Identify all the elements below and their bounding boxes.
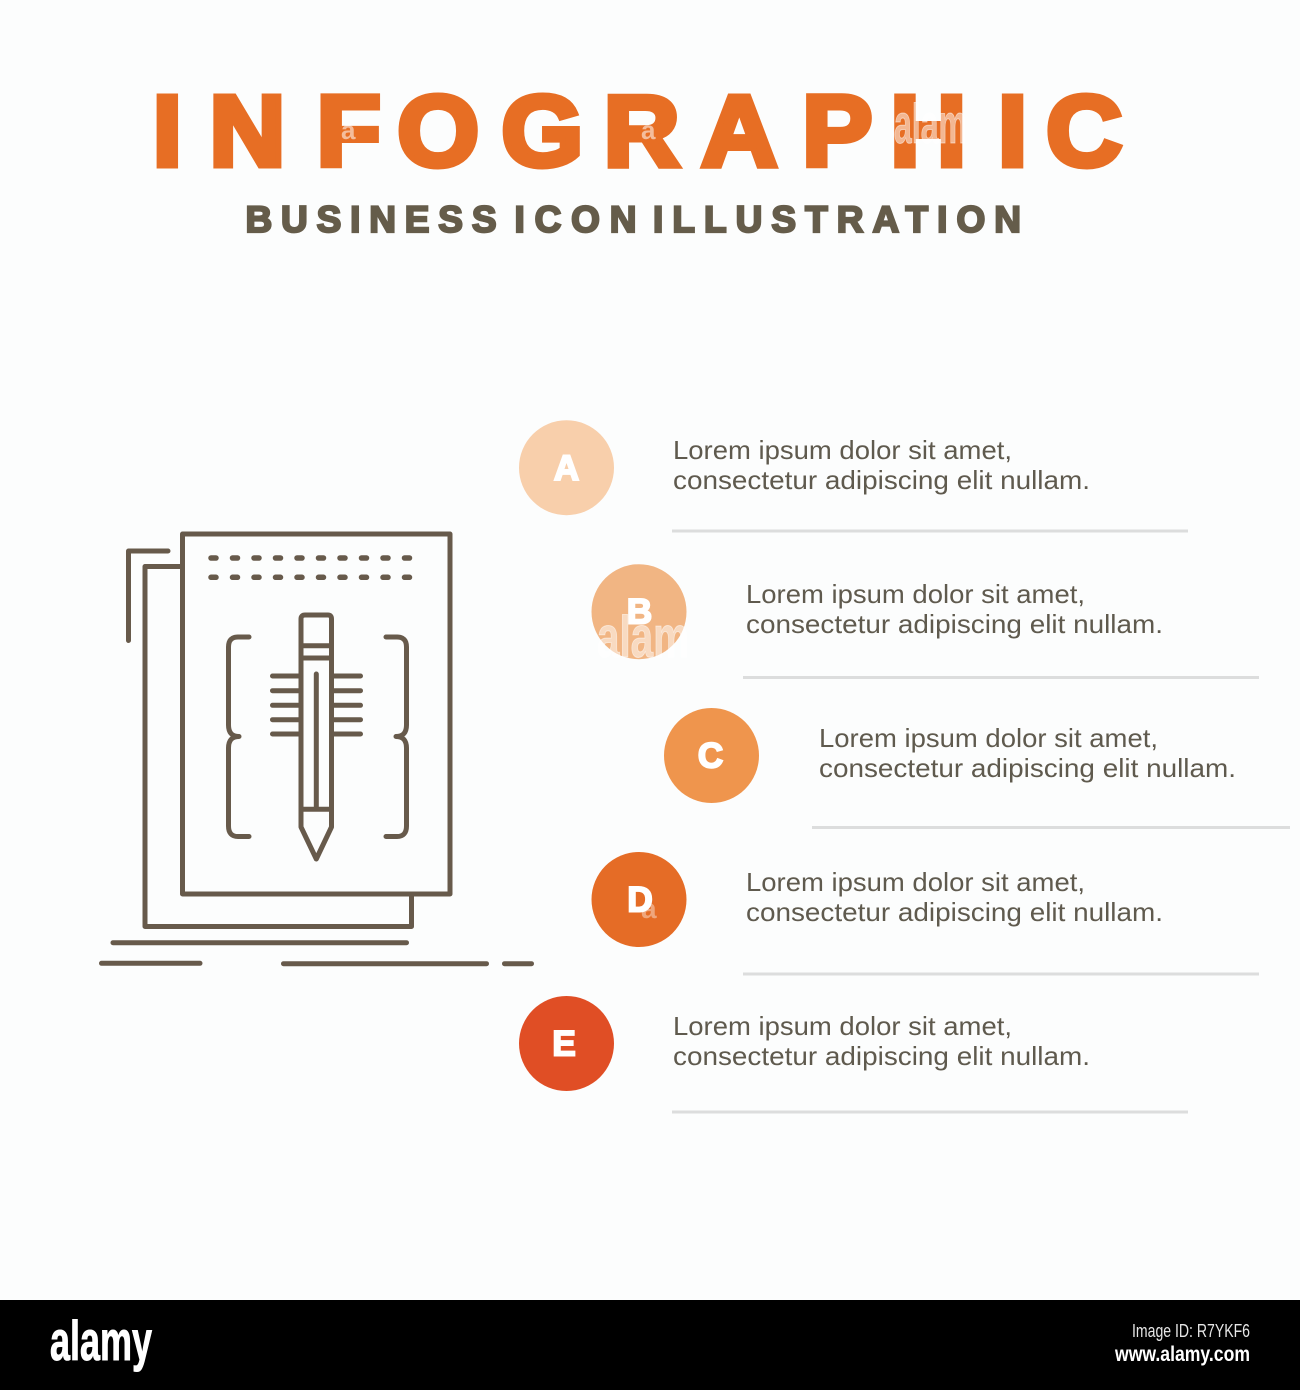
watermark overlays: alam	[894, 92, 967, 155]
text A: Lorem ipsum dolor sit amet,	[673, 435, 1012, 465]
divider A	[672, 530, 1188, 532]
image id: Image ID: R7YKF6	[1132, 1321, 1250, 1341]
text C: Lorem ipsum dolor sit amet,	[819, 723, 1158, 753]
text E: Lorem ipsum dolor sit amet,	[673, 1011, 1012, 1041]
text E	[673, 1011, 1090, 1071]
middle page	[145, 566, 412, 926]
text D: consectetur adipiscing elit nullam.	[746, 897, 1163, 927]
text B: consectetur adipiscing elit nullam.	[746, 609, 1163, 639]
step E	[519, 996, 1188, 1114]
ground lines	[102, 943, 532, 964]
text B	[746, 579, 1163, 639]
step D	[592, 852, 1259, 976]
dotted text rows	[211, 558, 410, 577]
subtitle	[246, 199, 1021, 240]
divider E	[672, 1110, 1188, 1114]
watermark overlays: a	[341, 115, 356, 145]
footer bar	[0, 1300, 1300, 1390]
text D	[746, 867, 1163, 927]
text C	[819, 723, 1236, 783]
text B: Lorem ipsum dolor sit amet,	[746, 579, 1085, 609]
circle C	[664, 708, 759, 803]
circle B	[592, 564, 686, 659]
step A	[519, 420, 1188, 532]
text C: consectetur adipiscing elit nullam.	[819, 753, 1236, 783]
subtitle: BUSINESS	[246, 199, 496, 240]
step B	[592, 564, 1259, 679]
watermark overlays: a	[641, 893, 657, 924]
divider B	[743, 676, 1259, 679]
letter A: A	[554, 449, 579, 488]
subtitle: ICON	[514, 199, 636, 240]
text A	[673, 435, 1090, 495]
letter B: B	[627, 592, 652, 632]
watermark overlays: alam	[597, 605, 689, 670]
divider D	[743, 972, 1259, 976]
right curly bracket	[386, 637, 406, 836]
step C	[664, 708, 1290, 829]
subtitle: ILLUSTRATION	[653, 199, 1021, 240]
watermark overlays: a	[641, 115, 656, 145]
back page corner	[128, 551, 168, 640]
divider C	[812, 826, 1290, 829]
front page	[182, 534, 450, 894]
footer logo: alamy	[50, 1309, 152, 1372]
pencil	[301, 615, 332, 859]
website: www.alamy.com	[1114, 1343, 1250, 1366]
circle D	[592, 852, 686, 947]
circle A	[519, 420, 614, 515]
circuit lines	[272, 676, 360, 734]
icon: code document with pencil	[102, 534, 532, 964]
letter D: D	[627, 880, 653, 920]
text A: consectetur adipiscing elit nullam.	[673, 465, 1090, 495]
letter C: C	[698, 736, 723, 776]
watermark overlays	[341, 92, 967, 924]
circle E	[519, 996, 614, 1091]
text D: Lorem ipsum dolor sit amet,	[746, 867, 1085, 897]
left curly bracket	[228, 637, 249, 836]
title: INFOGRAPHIC	[153, 75, 1122, 187]
letter E: E	[552, 1024, 576, 1064]
text E: consectetur adipiscing elit nullam.	[673, 1041, 1090, 1071]
